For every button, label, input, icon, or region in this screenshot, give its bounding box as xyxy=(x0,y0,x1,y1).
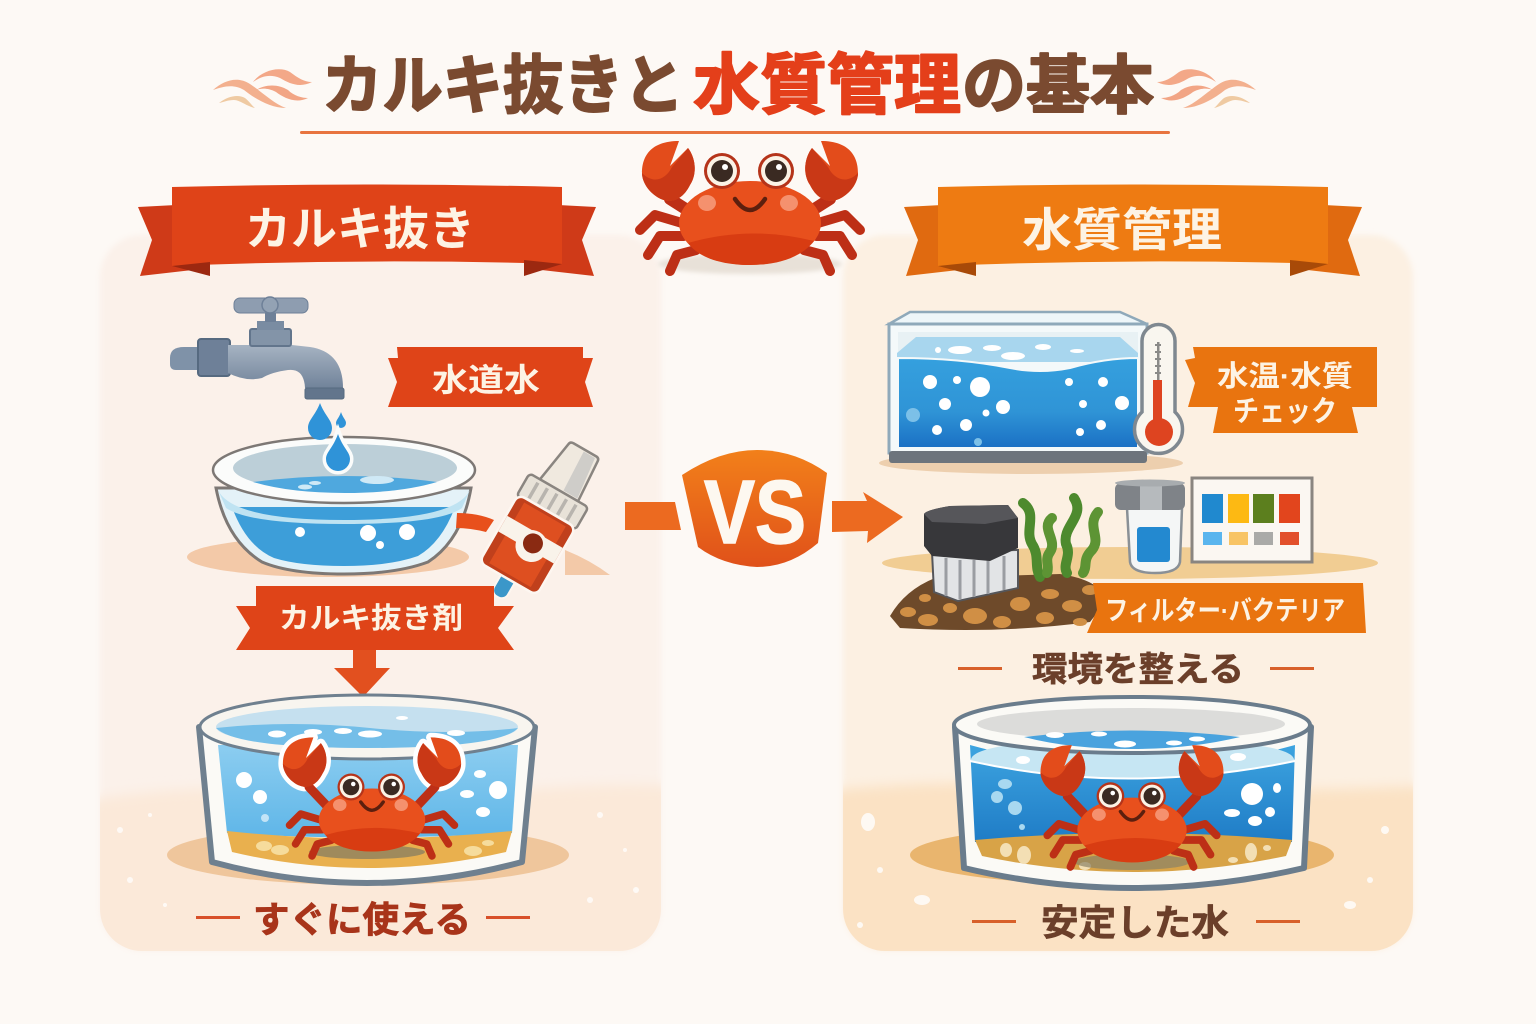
icon: top crab mascot xyxy=(640,141,860,274)
label: dechlorinator xyxy=(236,586,514,650)
icon: thermometer xyxy=(1135,325,1183,453)
title: 水質管理 xyxy=(693,48,961,122)
title: カルキ抜きと xyxy=(322,50,684,122)
arrow: down to tank xyxy=(334,650,390,697)
icon: crab in right tank xyxy=(1041,745,1223,867)
VS badge and arrows xyxy=(625,450,903,567)
icon: water drops xyxy=(308,403,350,471)
caption: prepare environment: 環境を整える xyxy=(1032,651,1244,689)
label: filter and bacteria xyxy=(1087,583,1366,633)
label: dechlorinator: カルキ抜き剤 xyxy=(279,602,463,635)
panel: right background xyxy=(833,235,1423,961)
VS badge and arrows: VS xyxy=(704,463,806,563)
title: の基本 xyxy=(962,50,1154,122)
caption: right result: 安定した水 xyxy=(1041,902,1229,943)
caption: left result: すぐに使える xyxy=(253,899,471,940)
icon: connector to bottle xyxy=(456,513,494,532)
icon: crab in left tank xyxy=(283,737,461,856)
caption: prepare environment xyxy=(958,651,1314,689)
icon: rectangular aquarium xyxy=(879,312,1183,474)
panel: right ribbon heading 水質管理: 水質管理 xyxy=(1022,204,1222,256)
icon: dechlorinator bottle xyxy=(469,432,612,613)
icon: colour chart xyxy=(1192,478,1312,562)
caption: left result xyxy=(196,899,530,940)
icon: water plants xyxy=(1023,498,1098,577)
label: water temperature and quality check: チェック xyxy=(1233,396,1337,428)
icon: left round tank with crab xyxy=(199,695,535,883)
icon: glass bowl of water xyxy=(213,437,475,574)
title underline xyxy=(300,131,1170,134)
label: tap water xyxy=(388,347,593,407)
icon: filter xyxy=(924,505,1018,601)
panel: left background xyxy=(90,235,671,961)
panel: right ribbon heading 水質管理 xyxy=(904,184,1362,276)
title wave ornament right xyxy=(1157,69,1256,108)
icon: right round tank with crab xyxy=(954,697,1311,888)
caption: right result xyxy=(972,902,1300,943)
icon: sand strip xyxy=(882,547,1378,579)
icon: right sand shadow xyxy=(910,825,1334,885)
panel: left ribbon heading カルキ抜き: カルキ抜き xyxy=(245,203,475,255)
title wave ornament left xyxy=(213,69,312,108)
label: tap water: 水道水 xyxy=(432,362,540,398)
icon: left sand shadow xyxy=(167,825,569,885)
icon: gravel xyxy=(890,574,1107,630)
icon: test vial xyxy=(1115,480,1185,573)
icon: water faucet xyxy=(170,297,344,399)
label: water temperature and quality check xyxy=(1185,347,1377,433)
title xyxy=(322,48,1154,122)
panel: left ribbon heading カルキ抜き xyxy=(138,184,596,276)
icon: bowl shadow xyxy=(187,537,610,577)
label: filter and bacteria: フィルター·バクテリア xyxy=(1105,596,1345,626)
label: water temperature and quality check: 水温·水質 xyxy=(1217,360,1353,393)
